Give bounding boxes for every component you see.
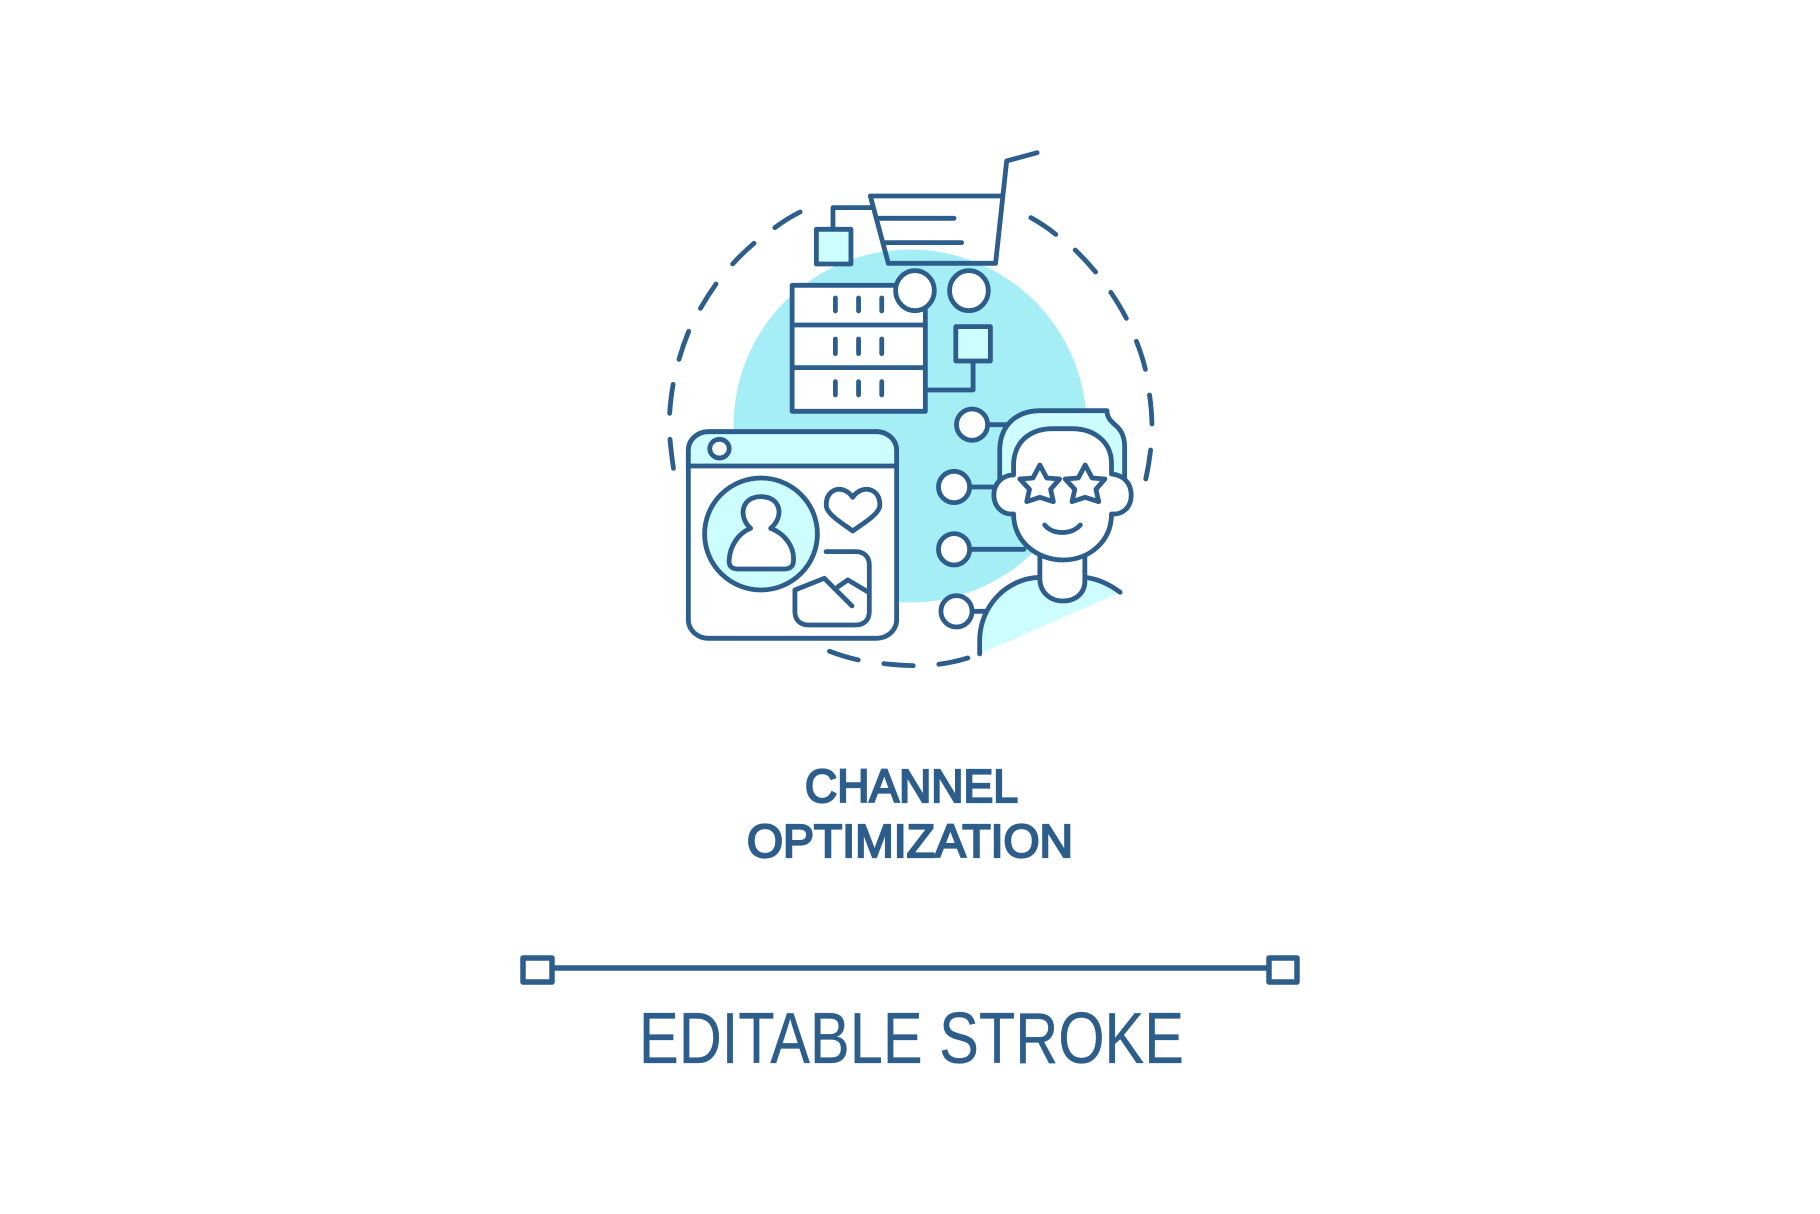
hair bbox=[1000, 411, 1125, 480]
icon: person with channel nodes bbox=[938, 409, 1131, 654]
title line 1: CHANNEL bbox=[805, 760, 1018, 812]
picture bbox=[795, 552, 869, 625]
channel nodes bbox=[938, 409, 1024, 627]
heart bbox=[826, 489, 880, 531]
avatar bbox=[705, 478, 817, 590]
background circle bbox=[734, 250, 1086, 602]
title bbox=[747, 760, 1073, 867]
title line 2: OPTIMIZATION bbox=[747, 815, 1073, 867]
icon: shopping cart with server bbox=[792, 153, 1037, 411]
cart tag bbox=[816, 208, 871, 264]
smile bbox=[1045, 525, 1080, 532]
server nodes bbox=[896, 271, 988, 311]
shopping cart bbox=[870, 153, 1037, 263]
server rack bbox=[792, 285, 925, 411]
editable stroke caption: EDITABLE STROKE bbox=[639, 999, 1184, 1079]
editable stroke line with handles bbox=[523, 958, 1297, 982]
neck bbox=[1040, 557, 1085, 601]
shoulders bbox=[980, 577, 1120, 654]
icon: profile window bbox=[688, 432, 897, 638]
head bbox=[994, 429, 1131, 560]
connected square bbox=[926, 327, 990, 390]
star eyes bbox=[1020, 465, 1105, 502]
dashed ring bbox=[670, 212, 1152, 666]
window frame bbox=[688, 432, 897, 638]
